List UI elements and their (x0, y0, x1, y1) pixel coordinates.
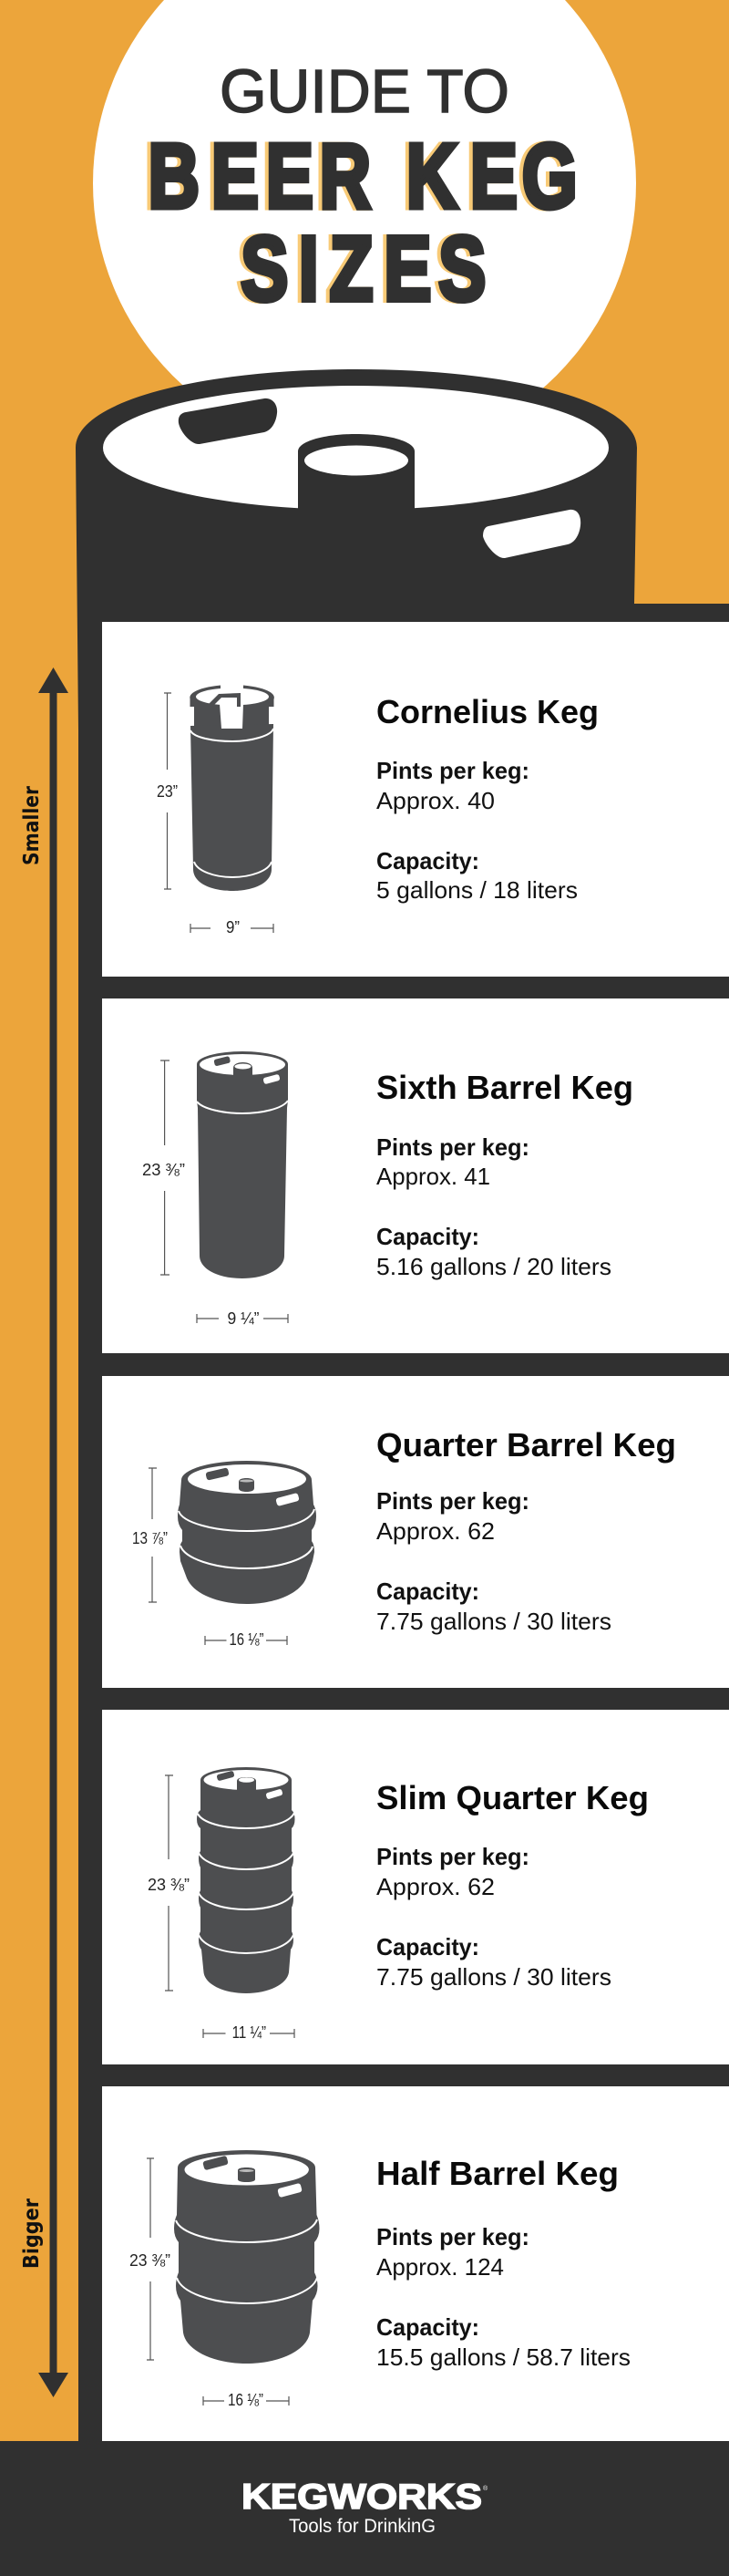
icon: Quarter Barrel keg (178, 1461, 316, 1604)
dimension: width: 16 ⅛” (228, 2391, 263, 2409)
title: GUIDE TO (220, 57, 509, 126)
dimension: height (157, 693, 178, 889)
dimension: width (205, 1630, 287, 1649)
logo (241, 2478, 488, 2537)
title: SIZES (237, 219, 482, 320)
footer (0, 2441, 729, 2576)
specs: Pints per keg: (376, 2223, 529, 2250)
dimension: width (197, 1309, 288, 1328)
specs: Pints per keg: (376, 757, 529, 784)
icon: Cornelius keg (190, 683, 274, 891)
specs: Approx. 40 (376, 787, 495, 814)
dimension: height (132, 1468, 168, 1602)
dark column and panel dividers (78, 622, 729, 2441)
dimension: height: 13 ⅞” (132, 1529, 168, 1547)
panel: Slim Quarter keg (102, 1710, 729, 2064)
dimension: width: 16 ⅛” (230, 1630, 264, 1649)
dimension: height (142, 1060, 185, 1275)
specs: Capacity: (376, 1578, 479, 1605)
title: BEERKEG (145, 126, 574, 228)
specs: Pints per keg: (376, 1843, 529, 1870)
panel: Half Barrel keg (102, 2086, 729, 2441)
dimension: height (129, 2158, 170, 2360)
panel: Cornelius keg (102, 622, 729, 977)
icon: Slim Quarter keg (197, 1767, 295, 1993)
dimension: width: 9” (226, 918, 240, 936)
specs (376, 1133, 611, 1280)
specs: 15.5 gallons / 58.7 liters (376, 2343, 631, 2371)
icon: Sixth Barrel keg (197, 1051, 288, 1278)
dimension: height: 23 ⅜” (142, 1161, 185, 1179)
title: SIZES (241, 219, 486, 320)
size arrow: Bigger (20, 2198, 44, 2269)
specs: Pints per keg: (376, 1487, 529, 1515)
specs: Approx. 41 (376, 1163, 490, 1190)
dimension: height: 23 ⅜” (129, 2251, 170, 2270)
specs: 7.75 gallons / 30 liters (376, 1963, 611, 1991)
dimension: height: 23” (157, 782, 178, 801)
dimension: width: 9 ¼” (228, 1309, 259, 1328)
heading: Half Barrel Keg (376, 2155, 619, 2192)
title (145, 57, 577, 320)
large keg illustration (76, 369, 729, 2441)
specs (376, 1487, 611, 1635)
panel: Quarter Barrel keg (102, 1376, 729, 1688)
size arrow: Smaller (20, 785, 44, 865)
dimension: height (148, 1775, 190, 1991)
specs (376, 1843, 611, 1991)
specs: Approx. 62 (376, 1517, 495, 1545)
specs: 5 gallons / 18 liters (376, 876, 578, 904)
dimension: height: 23 ⅜” (148, 1876, 190, 1894)
specs: 5.16 gallons / 20 liters (376, 1253, 611, 1280)
dimension: width (203, 2023, 294, 2042)
heading: Sixth Barrel Keg (376, 1069, 633, 1106)
specs: Approx. 124 (376, 2253, 504, 2281)
logo: KEGWORKS (241, 2478, 482, 2517)
dimension: width (203, 2391, 289, 2409)
specs: Pints per keg: (376, 1133, 529, 1161)
heading: Quarter Barrel Keg (376, 1426, 676, 1464)
logo: ® (483, 2485, 488, 2492)
heading: Cornelius Keg (376, 693, 599, 730)
specs (376, 2223, 631, 2371)
dimension: width (190, 918, 273, 936)
logo: Tools for DrinkinG (289, 2516, 436, 2537)
specs: Approx. 62 (376, 1873, 495, 1900)
title: BEERKEG (149, 126, 577, 228)
panel: Sixth Barrel keg (102, 998, 729, 1353)
title circle (93, 0, 636, 455)
specs: Capacity: (376, 2313, 479, 2341)
dimension: width: 11 ¼” (232, 2023, 266, 2042)
size arrow (20, 667, 68, 2397)
specs: Capacity: (376, 1223, 479, 1250)
specs: Capacity: (376, 847, 479, 874)
specs (376, 757, 578, 904)
specs: Capacity: (376, 1933, 479, 1960)
icon: Half Barrel keg (174, 2150, 319, 2364)
specs: 7.75 gallons / 30 liters (376, 1608, 611, 1635)
heading: Slim Quarter Keg (376, 1779, 649, 1816)
